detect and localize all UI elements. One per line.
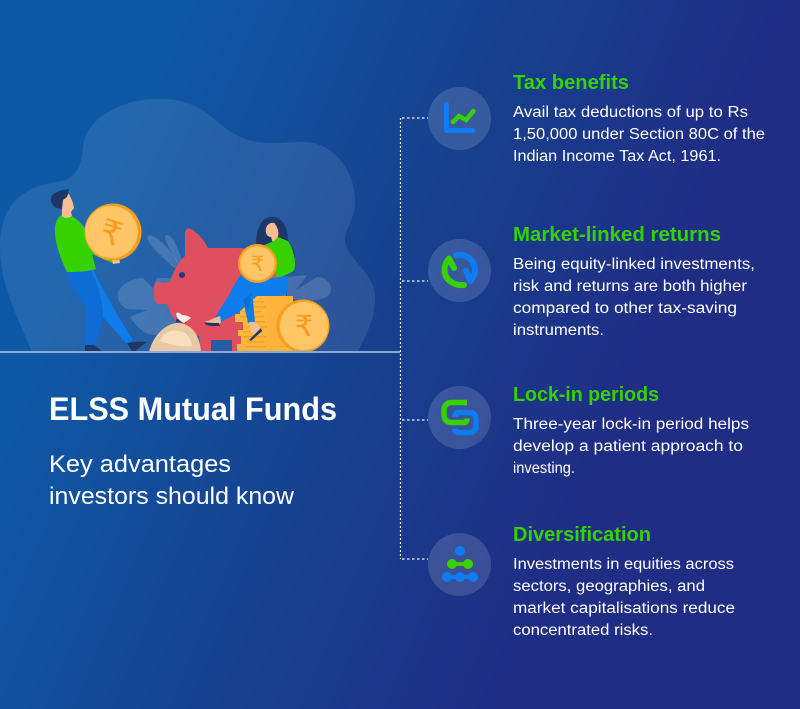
large coin on stack	[276, 300, 330, 352]
heading: tax benefits: Tax benefits	[513, 72, 629, 94]
text: market-linked returns	[513, 256, 755, 339]
text: tax benefits: 1,50,000 under Section 80C of the	[513, 126, 765, 143]
coin held by man	[84, 204, 142, 260]
text: diversification: concentrated risks.	[513, 622, 653, 639]
text: lock-in periods: Three-year lock-in period helps	[513, 416, 749, 433]
money bag	[149, 312, 201, 352]
subtitle	[49, 451, 295, 510]
coin stack	[235, 296, 293, 352]
leaves behind pig	[118, 235, 331, 335]
block: lock-in periods	[513, 384, 749, 477]
piggy bank	[154, 228, 286, 352]
text: diversification	[513, 556, 735, 639]
text: market-linked returns: risk and returns are both higher	[513, 278, 747, 295]
ground line	[0, 351, 400, 353]
icon: diversification nodes	[428, 533, 491, 596]
text: tax benefits: Avail tax deductions of up to Rs	[513, 104, 748, 121]
coin held by woman: ₹	[251, 253, 264, 276]
text: market-linked returns: Being equity-linked investments,	[513, 256, 755, 273]
background blob	[0, 99, 375, 352]
title: ELSS Mutual Funds	[49, 391, 337, 427]
dotted connector	[400, 118, 428, 559]
subtitle: Key advantages	[49, 451, 231, 478]
woman sitting	[204, 217, 295, 341]
illustration: people saving coins in a piggy bank	[0, 99, 375, 352]
text: market-linked returns: instruments.	[513, 322, 604, 339]
icon: tax benefits chart	[428, 87, 491, 150]
coin held by man: ₹	[95, 212, 127, 253]
heading: diversification: Diversification	[513, 524, 651, 546]
text: lock-in periods: investing.	[513, 460, 575, 477]
text: tax benefits	[513, 104, 765, 165]
heading: lock-in periods: Lock-in periods	[513, 384, 659, 406]
text: tax benefits: Indian Income Tax Act, 1961.	[513, 148, 721, 165]
text: market-linked returns: compared to other tax-saving	[513, 300, 737, 317]
text: diversification: market capitalisations reduce	[513, 600, 735, 617]
block: diversification	[513, 524, 735, 639]
man carrying coin	[51, 189, 147, 351]
text: diversification: Investments in equities across	[513, 556, 734, 573]
block: market-linked returns	[513, 224, 755, 339]
large coin on stack: ₹	[295, 311, 313, 343]
text: lock-in periods	[513, 416, 749, 477]
subtitle: investors should know	[49, 483, 295, 510]
text: lock-in periods: develop a patient approach to	[513, 438, 743, 455]
block: tax benefits	[513, 72, 765, 165]
icon: lock-in chain links	[428, 386, 491, 449]
text: diversification: sectors, geographies, and	[513, 578, 705, 595]
coin held by woman	[238, 244, 277, 283]
heading: market-linked returns: Market-linked returns	[513, 224, 721, 246]
icon: market-linked returns cycle	[428, 239, 491, 302]
